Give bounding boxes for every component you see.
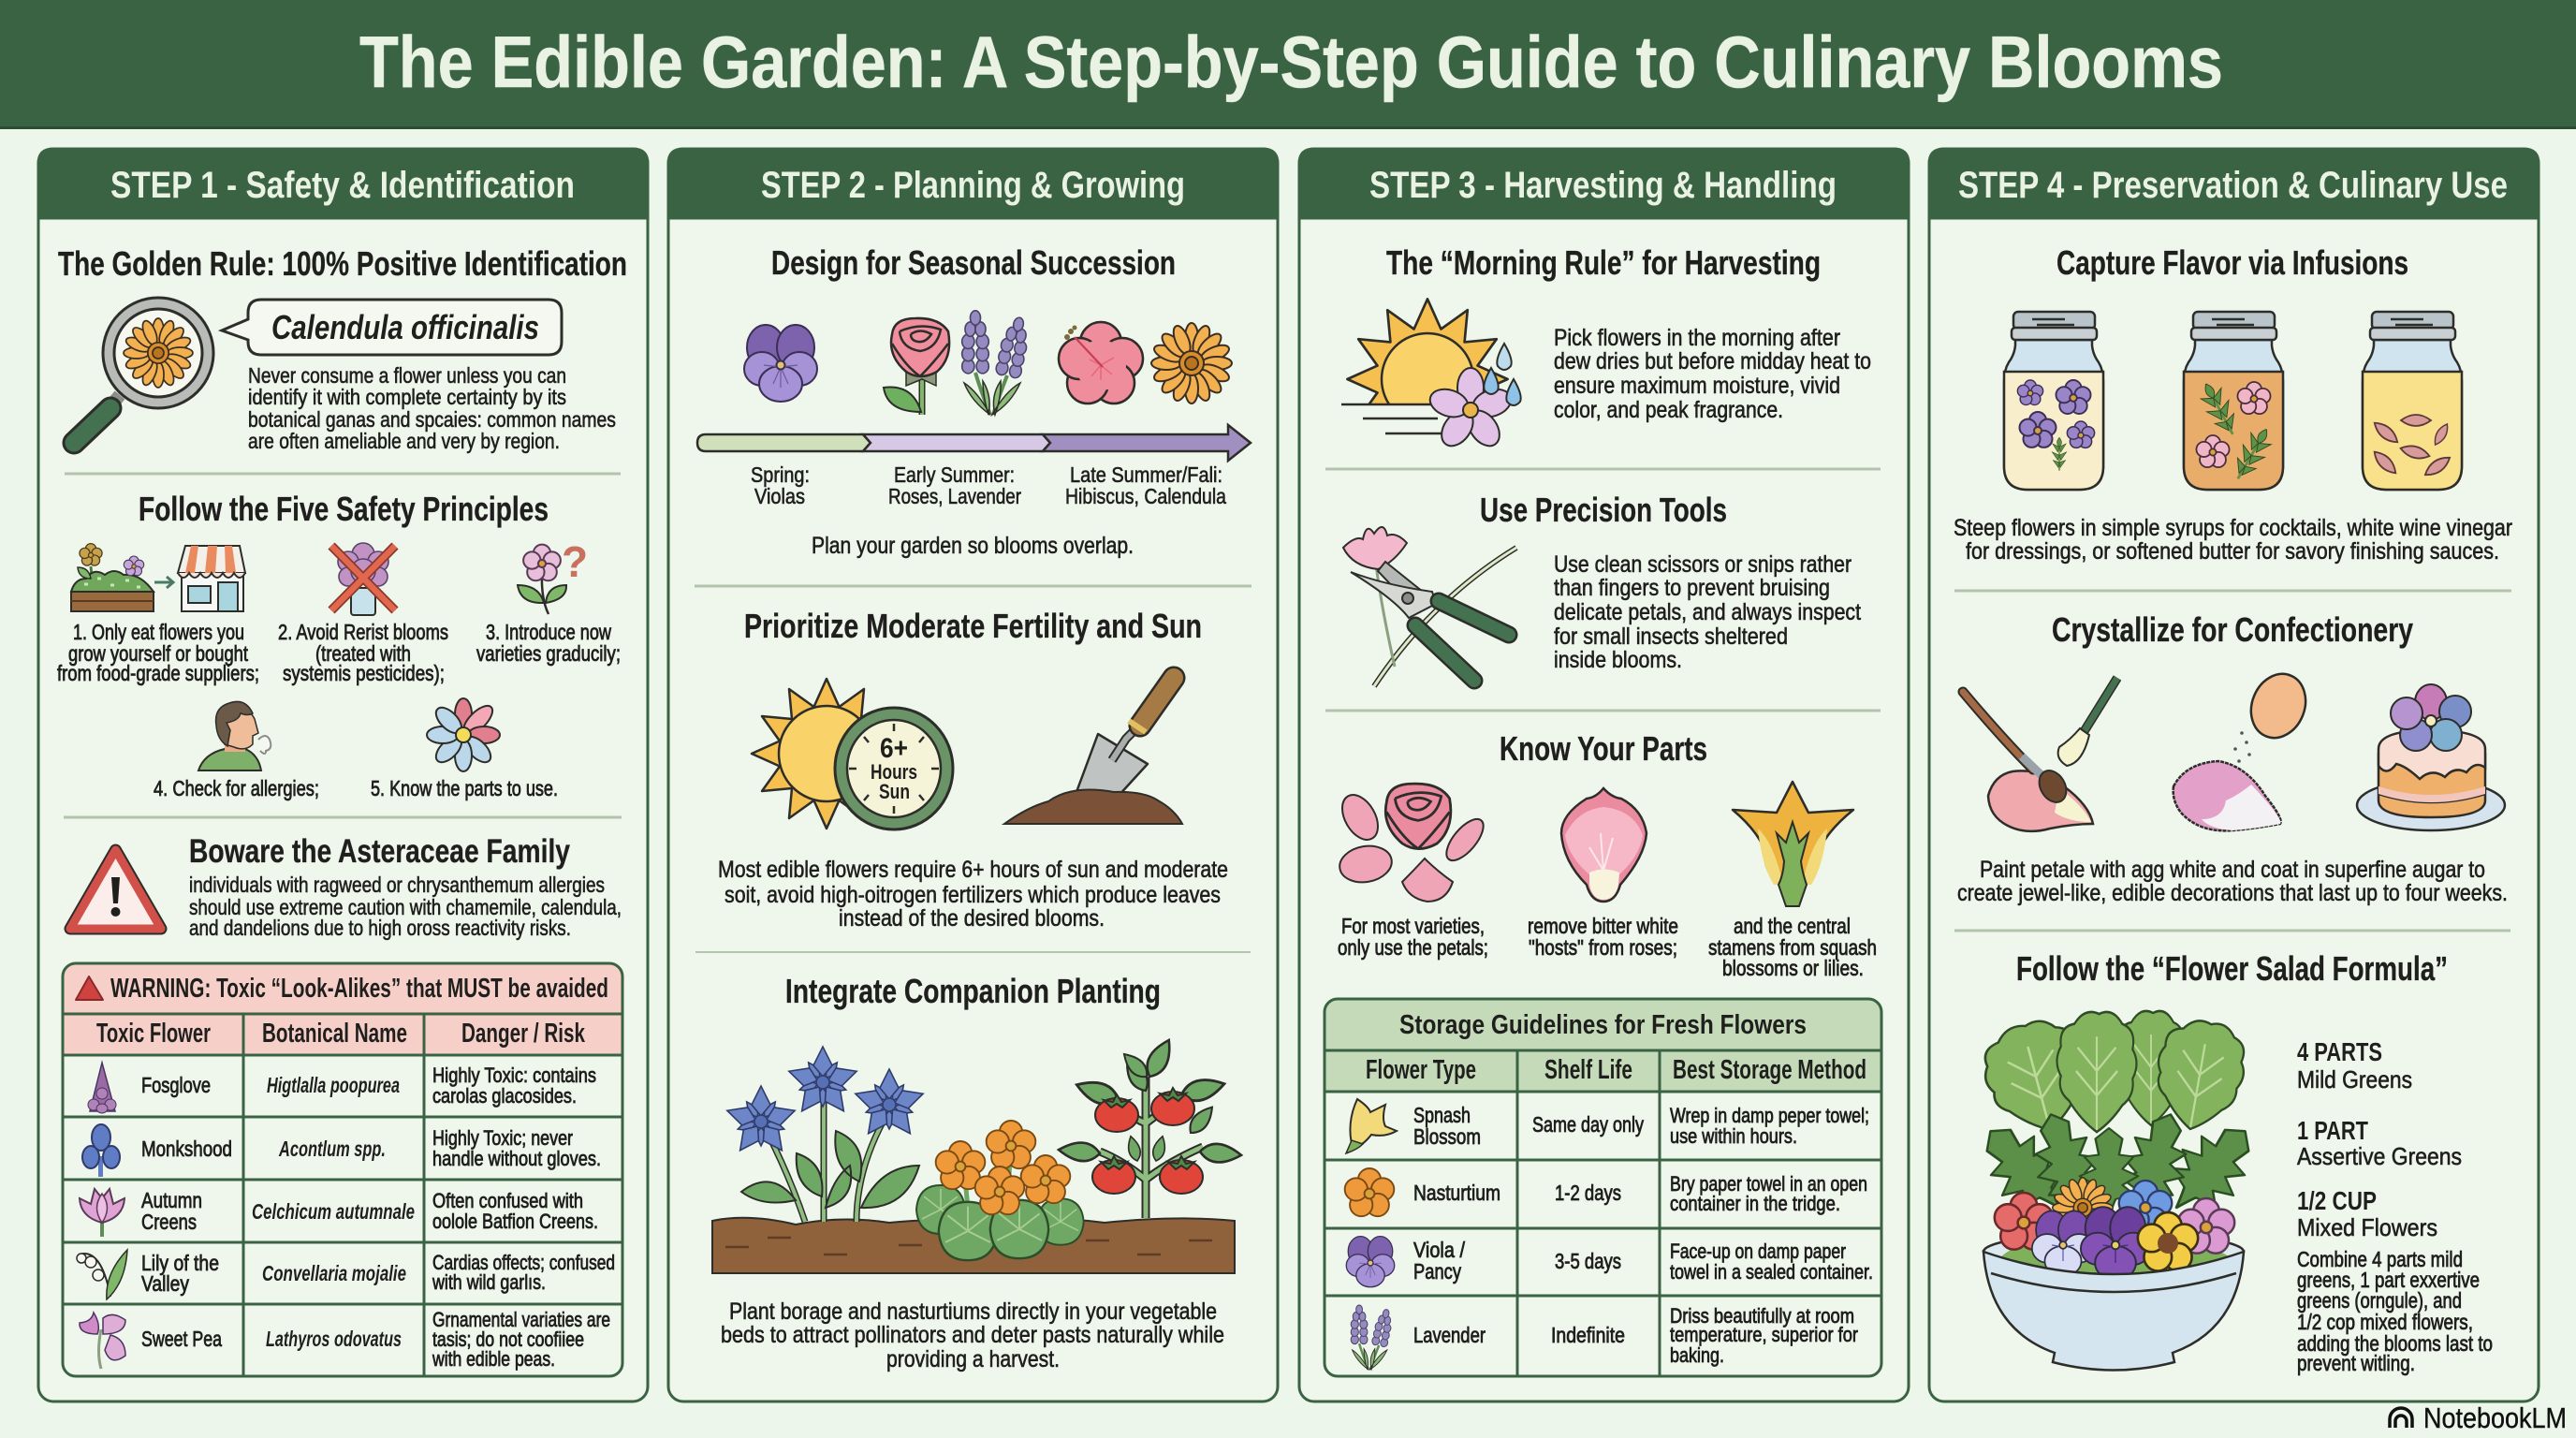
row: lavender: temperature, superior for [1670, 1323, 1858, 1346]
heading: seasonal succession: Design for Seasonal Succession [771, 243, 1176, 282]
text: parts captions: stamens from squash [1708, 935, 1877, 960]
tomato plant [1058, 1035, 1242, 1218]
row: lavender: Lavender [1413, 1323, 1486, 1347]
row: sweet pea: Sweet Pea [141, 1327, 222, 1351]
text: principle 1 [57, 620, 259, 685]
text: crystallize description: Paint petale with agg white and coat in superfine augar to [1980, 857, 2485, 883]
row: monkshood: Highly Toxic; never [432, 1126, 573, 1150]
lettuce leaves [1975, 1011, 2251, 1142]
timeline labels: Early Summer: [894, 462, 1015, 487]
text: salad instructions [2297, 1247, 2493, 1375]
text: morning rule: dew dries but before midday heat to [1554, 348, 1871, 374]
icon: pruning snips with flower [1343, 527, 1516, 686]
text: asteraceae warning: and dandelions due to high oross reactivity risks. [189, 916, 571, 940]
row: squash blossom: Same day only [1532, 1112, 1644, 1137]
text: precision tools: Use clean scissors or snips rather [1554, 551, 1852, 578]
text: crystallize description [1957, 857, 2508, 906]
text: morning rule: ensure maximum moisture, vivid [1554, 373, 1840, 399]
text: golden rule description: identify it with complete certainty by its [248, 385, 566, 409]
text: fertility description: instead of the desired blooms. [839, 905, 1105, 932]
table: toxic look-alikes [63, 963, 622, 1376]
heading: crystallize: Crystallize for Confectionery [2052, 610, 2413, 649]
text: morning rule [1554, 325, 1871, 423]
text: asteraceae warning [189, 873, 622, 940]
icon: viola syrup jar [2004, 312, 2103, 490]
icon: viola [744, 325, 817, 402]
row: sweet pea: Grnamental variaties are [432, 1308, 610, 1331]
text: morning rule: color, and peak fragrance. [1554, 397, 1783, 423]
icon: magnifying glass over calendula [74, 298, 213, 443]
borage flowers [724, 1047, 926, 1222]
row: nasturtium: container in the tridge. [1670, 1192, 1840, 1215]
text: salad instructions: Combine 4 parts mild [2297, 1247, 2463, 1271]
row: nasturtium: Bry paper towel in an open [1670, 1172, 1867, 1196]
icon: painting petal with egg white [1963, 678, 2117, 831]
row: nasturtium: 1-2 days [1555, 1181, 1621, 1205]
panel: step 3 harvesting and handling [1299, 149, 1909, 1401]
text: precision tools: than fingers to prevent bruising [1554, 575, 1830, 601]
timeline labels: Spring: [751, 462, 810, 487]
heading: companion planting: Integrate Companion Planting [785, 972, 1161, 1010]
step 3 heading: STEP 3 - Harvesting & Handling [1369, 165, 1837, 206]
row: monkshood [82, 1124, 601, 1177]
heading: salad formula: Follow the “Flower Salad Formula” [2016, 949, 2448, 988]
text: parts captions: only use the petals; [1338, 935, 1488, 960]
heading: golden rule: The Golden Rule: 100% Positive Identification [58, 244, 627, 283]
text: parts captions: and the central [1734, 914, 1851, 938]
timeline labels [751, 462, 1226, 508]
callout: calendula officinalis: Calendula officinalis [271, 308, 539, 346]
text: salad instructions: 1/2 cop mixed flowers, [2297, 1310, 2473, 1334]
text: golden rule description [248, 363, 616, 453]
row: lavender: baking. [1670, 1343, 1724, 1367]
text: asteraceae warning: individuals with ragweed or chrysanthemum allergies [189, 873, 605, 897]
column headers: Shelf Life [1544, 1055, 1632, 1085]
text: principle 2: systemis pesticides); [283, 661, 445, 685]
row: foxglove: Higtlalla poopurea [267, 1073, 400, 1097]
mixed flowers [1995, 1178, 2234, 1280]
icon: rose with loose petals [1335, 784, 1490, 902]
text: precision tools [1554, 551, 1861, 673]
icon: garden bed to store [71, 544, 245, 611]
icon: hibiscus [1059, 322, 1143, 404]
icon: cake with crystallized flower [2357, 684, 2505, 830]
row: lily of the valley: Valley [141, 1271, 189, 1296]
text: morning rule: Pick flowers in the morning after [1554, 325, 1840, 351]
timeline labels: Roses, Lavender [888, 484, 1021, 508]
step 2 heading: STEP 2 - Planning & Growing [761, 165, 1185, 206]
text: principle 2: 2. Avoid Rerist blooms [278, 620, 448, 644]
text: infusions description: for dressings, or softened butter for savory finishing sauces. [1966, 538, 2499, 565]
text: asteraceae warning: should use extreme caution with chamemile, calendula, [189, 895, 622, 919]
row: viola: towel in a sealed container. [1670, 1260, 1873, 1284]
text: principle 1: 1. Only eat flowers you [73, 620, 244, 644]
row: squash blossom: Blossom [1413, 1124, 1481, 1149]
text: salad parts list [2297, 1037, 2462, 1241]
text: salad parts list: 1/2 CUP [2297, 1186, 2377, 1215]
table: storage guidelines [1325, 999, 1881, 1376]
row: squash blossom: Wrep in damp peper towel; [1670, 1104, 1869, 1127]
column headers: Best Storage Method [1673, 1055, 1866, 1085]
row: squash blossom: Spnash [1413, 1103, 1471, 1127]
text: principle 2: (treated with [315, 641, 411, 666]
icon: sunrise with flower and dew [1341, 299, 1521, 460]
text: fertility description [718, 857, 1228, 932]
text: principle 1: from food-grade suppliers; [57, 661, 259, 685]
icon: squash blossom [1733, 782, 1853, 906]
row: lavender: Indefinite [1551, 1323, 1625, 1347]
panel: step 2 planning and growing [668, 149, 1278, 1401]
title banner: The Edible Garden: A Step-by-Step Guide to Culinary Blooms [359, 21, 2223, 103]
text: companion description: beds to attract pollinators and deter pasts naturally while [721, 1322, 1224, 1348]
row: foxglove: carolas glacosides. [432, 1084, 577, 1108]
text: companion description [721, 1299, 1224, 1372]
text: principle 2 [278, 620, 448, 685]
row: lily of the valley: Cardias offects; confused [432, 1251, 615, 1274]
row: viola [1346, 1237, 1873, 1287]
column headers: Toxic Flower [96, 1019, 211, 1049]
column headers: Flower Type [1366, 1055, 1476, 1085]
timeline labels: Late Summer/Fali: [1070, 462, 1222, 487]
row: lily of the valley: with wild garlıs. [432, 1270, 546, 1294]
arrow: garden to store [154, 577, 173, 588]
icon: flower with question mark [518, 537, 588, 614]
row: autumn crocus: Creens [141, 1210, 197, 1234]
timeline arrow [697, 425, 1251, 461]
heading: five safety principles: Follow the Five Safety Principles [139, 490, 549, 528]
callout: calendula officinalis [222, 300, 562, 355]
heading: fertility and sun: Prioritize Moderate Fertility and Sun [744, 607, 1202, 645]
text: plan overlap: Plan your garden so blooms overlap. [812, 533, 1134, 559]
row: viola: 3-5 days [1555, 1249, 1621, 1273]
panel: step 4 preservation and culinary use [1929, 149, 2539, 1401]
illustration: companion planting garden bed [712, 1035, 1242, 1273]
icon: crossed out florist bouquet [331, 543, 395, 615]
text: salad instructions: greens, 1 part exxertive [2297, 1268, 2480, 1292]
row: autumn crocus: oolole Batfion Creens. [432, 1210, 598, 1233]
text: salad instructions: greens (orngule), and [2297, 1288, 2462, 1313]
table title: Storage Guidelines for Fresh Flowers [1399, 1010, 1807, 1040]
step 1 heading: STEP 1 - Safety & Identification [110, 165, 575, 206]
text: companion description: providing a harvest. [886, 1346, 1060, 1372]
icon: trowel in soil [1004, 678, 1182, 824]
row: foxglove [88, 1063, 596, 1113]
row: autumn crocus: Often confused with [432, 1189, 583, 1212]
text: parts captions: "hosts" from roses; [1529, 935, 1677, 960]
text: fertility description: Most edible flowers require 6+ hours of sun and moderate [718, 857, 1228, 883]
title banner [0, 0, 2576, 129]
icon: rose [884, 318, 949, 415]
icon: flower with question mark: ? [562, 537, 588, 586]
row: autumn crocus: Autumn [141, 1188, 202, 1212]
row: monkshood: Acontlum spp. [278, 1137, 386, 1161]
heading: beware asteraceae: Boware the Asteraceae Family [189, 833, 570, 870]
column headers: Danger / Risk [461, 1019, 586, 1049]
column headers: Botanical Name [262, 1019, 407, 1049]
text: principle 3: varieties graducily; [476, 641, 621, 666]
text: golden rule description: Never consume a flower unless you can [248, 363, 566, 388]
text: companion description: Plant borage and nasturtiums directly in your vegetable [729, 1299, 1217, 1325]
row: lily of the valley: Lily of the [141, 1251, 219, 1275]
icon: yellow petal jar [2363, 312, 2462, 490]
text: salad parts list: 4 PARTS [2297, 1037, 2382, 1066]
text: principle 4: 4. Check for allergies; [154, 776, 319, 800]
row: monkshood: handle without gloves. [432, 1147, 601, 1170]
bowl [1983, 1252, 2244, 1371]
row: sweet pea: Lathyros odovatus [266, 1327, 402, 1351]
row: viola: Pancy [1413, 1259, 1461, 1284]
heading: infusions: Capture Flavor via Infusions [2056, 243, 2408, 282]
table title: WARNING: Toxic “Look-Alikes” that MUST be avaided [110, 974, 608, 1004]
heading: precision tools: Use Precision Tools [1480, 491, 1727, 529]
row: nasturtium [1345, 1168, 1867, 1216]
text: principle 1: grow yourself or bought [68, 641, 248, 666]
text: salad parts list: 1 PART [2297, 1116, 2368, 1145]
text: salad parts list: Assertive Greens [2297, 1142, 2462, 1170]
heading: know your parts: Know Your Parts [1500, 729, 1707, 768]
icon: lavender [962, 311, 1032, 415]
heading: morning rule: The “Morning Rule” for Harvesting [1386, 243, 1821, 282]
text: principle 3 [476, 620, 621, 666]
icon: sun with six hour clock: 6+ [880, 733, 908, 764]
row: sweet pea [80, 1308, 610, 1371]
text: parts captions: remove bitter white [1528, 914, 1678, 938]
icon: person breathing allergy [198, 701, 271, 770]
icon: petal with white heel [1561, 788, 1647, 902]
nasturtiums [916, 1121, 1084, 1260]
text: fertility description: soit, avoid high-oitrogen fertilizers which produce leaves [724, 882, 1221, 908]
timeline labels: Hibiscus, Calendula [1065, 484, 1226, 508]
text: salad instructions: adding the blooms last to [2297, 1331, 2493, 1356]
icon: sun with six hour clock [752, 679, 953, 829]
row: squash blossom: use within hours. [1670, 1124, 1797, 1148]
icon: warning triangle [70, 850, 161, 929]
text: salad parts list: Mild Greens [2297, 1065, 2412, 1093]
text: infusions description [1954, 515, 2512, 565]
row: viola: Viola / [1413, 1238, 1466, 1262]
text: parts captions: For most varieties, [1341, 914, 1485, 938]
row: sweet pea: with edible peas. [432, 1347, 555, 1371]
text: salad parts list: Mixed Flowers [2297, 1213, 2437, 1241]
icon: warning triangle small [76, 976, 103, 1000]
row: lavender [1351, 1304, 1858, 1370]
row: lily of the valley: Convellaria mojalie [262, 1261, 406, 1285]
row: nasturtium: Nasturtium [1413, 1181, 1500, 1205]
icon: calendula [1151, 323, 1232, 404]
text: parts captions: blossoms or lilies. [1722, 956, 1864, 980]
icon: sun with six hour clock: Hours [871, 760, 917, 784]
row: autumn crocus: Celchicum autumnale [252, 1199, 415, 1224]
row: autumn crocus [80, 1188, 598, 1237]
icon: flower with highlighted part [427, 698, 500, 771]
timeline labels: Violas [754, 484, 805, 508]
column headers [1366, 1055, 1866, 1085]
row: squash blossom [1346, 1099, 1869, 1153]
column headers [96, 1019, 586, 1049]
text: precision tools: inside blooms. [1554, 647, 1682, 673]
illustration: salad bowl [1965, 1011, 2271, 1371]
icon: amber infused jar [2184, 312, 2283, 490]
arugula leaves [1965, 1105, 2271, 1230]
row: viola: Face-up on damp paper [1670, 1240, 1846, 1263]
row: foxglove: Fosglove [141, 1073, 211, 1097]
text: parts captions [1338, 914, 1877, 980]
icon: egg and sugared petal [2174, 666, 2315, 830]
row: lily of the valley [77, 1250, 615, 1299]
text: golden rule description: are often ameliable and very by region. [248, 429, 560, 453]
icon: sun with six hour clock: Sun [879, 780, 910, 803]
text: precision tools: delicate petals, and always inspect [1554, 599, 1861, 625]
row: sweet pea: tasis; do not coofiiee [432, 1328, 584, 1351]
row: foxglove: Highly Toxic: contains [432, 1064, 596, 1087]
panel: step 1 safety and identification [38, 149, 648, 1401]
text: principle 5: 5. Know the parts to use. [371, 776, 558, 800]
text: precision tools: for small insects sheltered [1554, 624, 1788, 650]
row: monkshood: Monkshood [141, 1137, 232, 1161]
row: lavender: Driss beautifully at room [1670, 1304, 1854, 1328]
text: golden rule description: botanical ganas and spcaies: common names [248, 407, 616, 432]
text: principle 3: 3. Introduce now [486, 620, 611, 644]
text: salad instructions: prevent witling. [2297, 1351, 2415, 1375]
